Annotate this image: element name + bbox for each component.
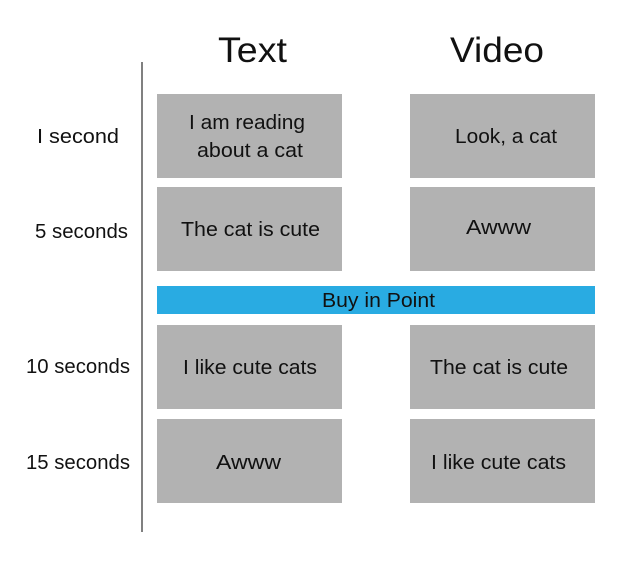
- time label: 10 seconds: 10 seconds: [26, 356, 130, 378]
- heading: Text column: Text: [218, 31, 287, 70]
- time label: 15 seconds: 15 seconds: [26, 452, 130, 474]
- video box: 1 second: Look, a cat: [455, 126, 557, 148]
- video box: 10 seconds: [410, 325, 595, 409]
- heading: Video column: Video: [450, 31, 544, 70]
- text box: 15 seconds: [157, 419, 342, 503]
- text box: 10 seconds: [157, 325, 342, 409]
- text box: 5 seconds: The cat is cute: [181, 219, 320, 241]
- text box: 1 second: about a cat: [197, 140, 303, 162]
- buy in point bar: [157, 286, 595, 314]
- timeline axis: [141, 62, 143, 532]
- video box: 15 seconds: I like cute cats: [431, 452, 566, 474]
- video box: 10 seconds: The cat is cute: [430, 357, 568, 379]
- text box: 10 seconds: I like cute cats: [183, 357, 317, 379]
- text box: 1 second: I am reading: [189, 112, 305, 134]
- video box: 1 second: [410, 94, 595, 178]
- video box: 5 seconds: [410, 187, 595, 271]
- text box: 5 seconds: [157, 187, 342, 271]
- video box: 15 seconds: [410, 419, 595, 503]
- text box: 15 seconds: Awww: [216, 452, 282, 474]
- time label: 1 second: I second: [37, 126, 119, 148]
- text box: 1 second: [157, 94, 342, 178]
- buy in point bar: Buy in Point: [322, 290, 435, 312]
- time label: 5 seconds: 5 seconds: [35, 221, 128, 243]
- video box: 5 seconds: Awww: [466, 217, 532, 239]
